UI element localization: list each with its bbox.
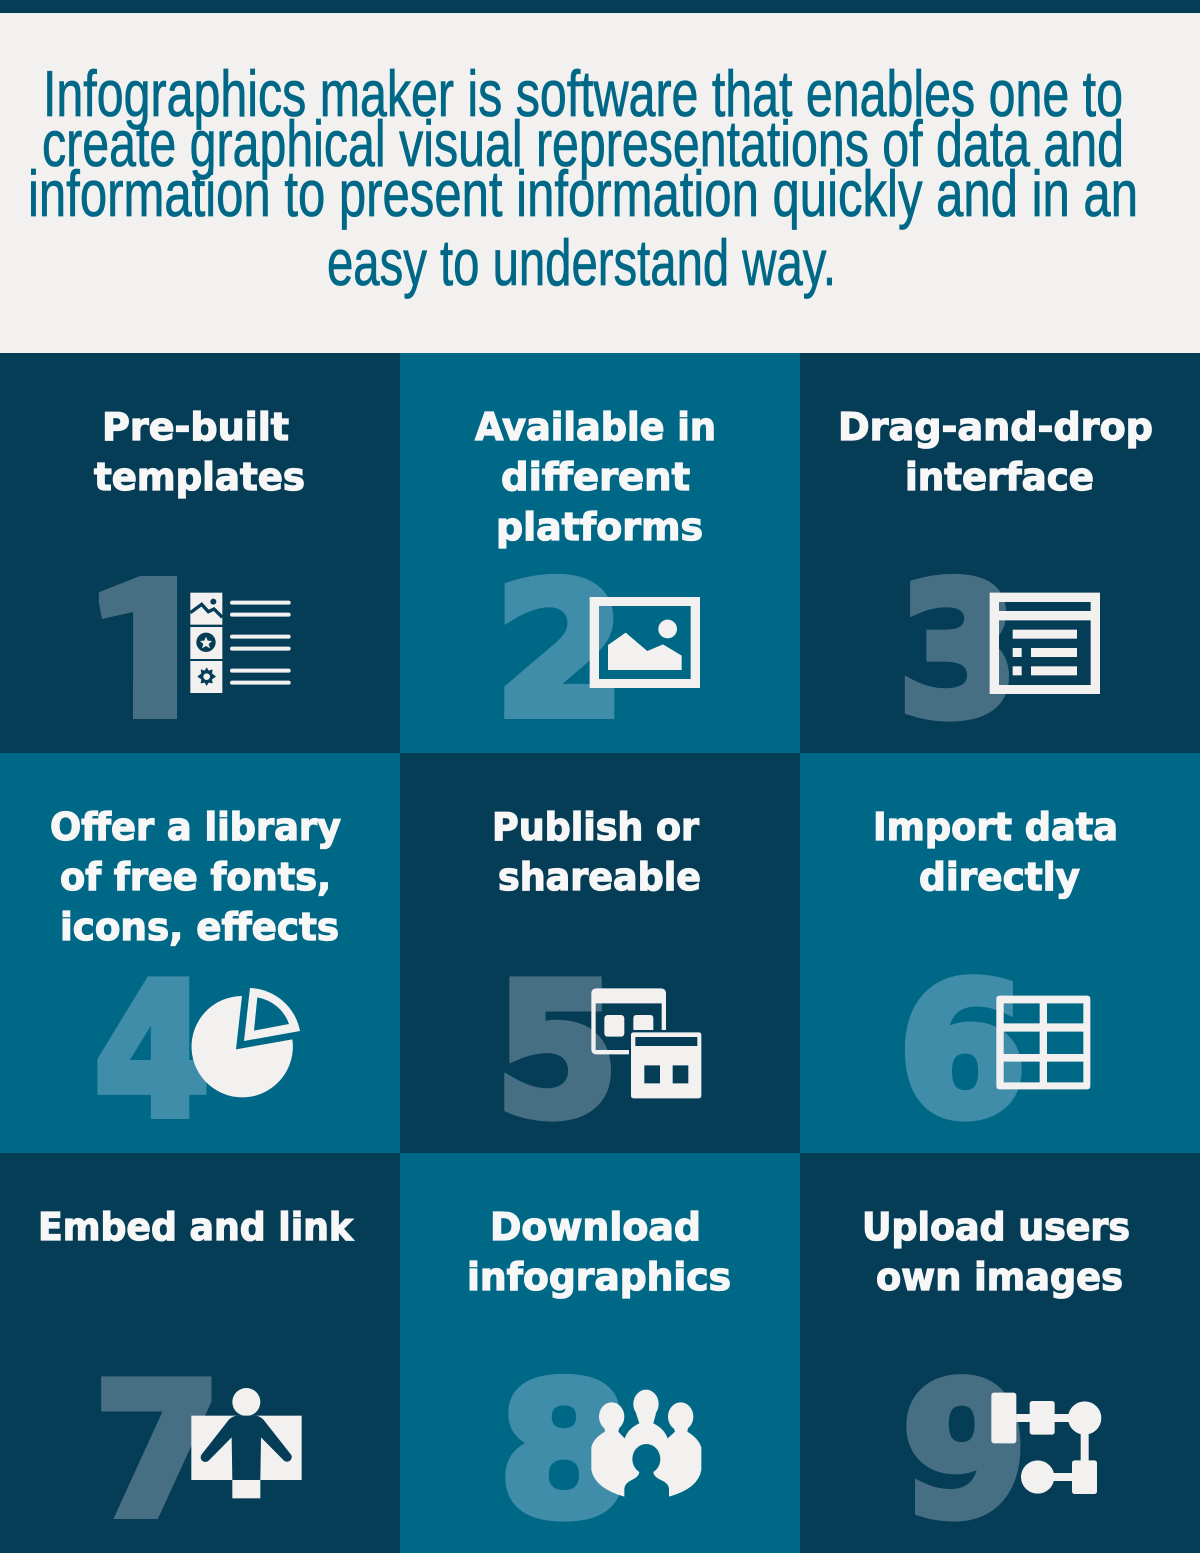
number 7: 7 xyxy=(94,1345,221,1553)
heading: platforms xyxy=(496,505,703,549)
heading: Publish or xyxy=(492,805,699,849)
heading xyxy=(838,405,1153,499)
panel: 7 embed and link xyxy=(0,1153,400,1553)
heading xyxy=(492,805,701,899)
heading: Embed and link xyxy=(38,1205,354,1249)
heading: infographics xyxy=(467,1255,731,1299)
panel: 1 pre-built templates xyxy=(94,410,304,719)
icon: windows xyxy=(591,988,701,1098)
title: easy to understand way. xyxy=(327,226,836,299)
panel: 5 publish xyxy=(400,753,800,1157)
heading: icons, effects xyxy=(60,905,339,949)
heading: Offer a library xyxy=(50,805,341,849)
heading: templates xyxy=(94,455,305,499)
heading: Import data xyxy=(873,805,1118,849)
panel: 3 drag-and-drop xyxy=(800,353,1200,757)
number 9: 9 xyxy=(902,1345,1027,1553)
panel: 6 import data xyxy=(800,753,1200,1157)
icon: group of people xyxy=(591,1390,701,1498)
icon: flow diagram xyxy=(991,1393,1101,1494)
heading: Upload users xyxy=(862,1205,1130,1249)
heading: Download xyxy=(490,1205,701,1249)
heading: Pre-built xyxy=(102,405,289,449)
icon: template list xyxy=(190,593,289,693)
panel: 2 different platforms xyxy=(400,353,800,757)
heading xyxy=(467,1205,731,1299)
header panel xyxy=(0,13,1200,353)
heading: interface xyxy=(905,455,1094,499)
icon: table xyxy=(996,996,1090,1089)
heading: of free fonts, xyxy=(60,855,331,899)
heading xyxy=(94,405,305,499)
number 4: 4 xyxy=(94,945,210,1157)
heading xyxy=(475,405,716,549)
heading: Available in xyxy=(475,405,716,449)
number 5: 5 xyxy=(496,945,618,1157)
heading xyxy=(873,805,1118,899)
number 1: 1 xyxy=(85,545,225,757)
icon: pie chart xyxy=(192,988,300,1097)
number 2: 2 xyxy=(494,545,626,757)
heading: directly xyxy=(919,855,1080,899)
heading: own images xyxy=(876,1255,1123,1299)
heading: different xyxy=(501,455,690,499)
heading xyxy=(50,805,341,949)
number 8: 8 xyxy=(499,1345,629,1553)
title xyxy=(28,57,1138,299)
icon: image frame xyxy=(590,597,700,688)
heading xyxy=(862,1205,1130,1299)
icon: person xyxy=(191,1388,302,1498)
icon: window list xyxy=(990,593,1100,694)
heading: Drag-and-drop xyxy=(838,405,1153,449)
panel: 8 download xyxy=(400,1153,800,1553)
heading: shareable xyxy=(498,855,701,899)
panel: 9 upload xyxy=(800,1153,1200,1553)
number 3: 3 xyxy=(898,545,1018,757)
panel: 4 library xyxy=(0,753,400,1157)
number 6: 6 xyxy=(898,945,1026,1157)
